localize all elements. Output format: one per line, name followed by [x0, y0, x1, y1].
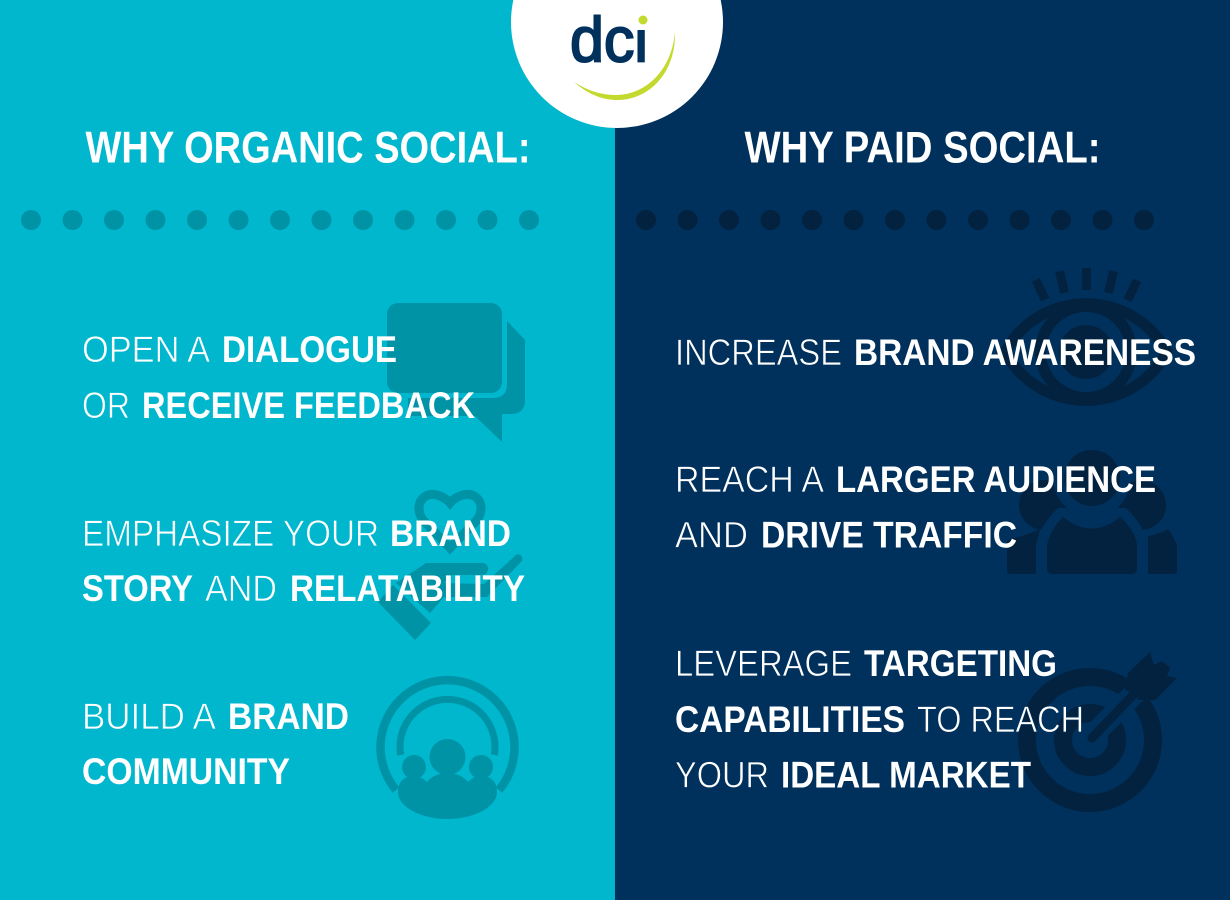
text: open a dialogue: OR — [82, 385, 130, 426]
dotted row: paid — [636, 210, 1154, 230]
text: targeting capabilities: YOUR — [675, 754, 769, 796]
panel: paid social background — [615, 0, 1230, 900]
text: targeting capabilities: TO REACH — [917, 699, 1084, 740]
text: brand community: BUILD A — [82, 696, 216, 737]
text: open a dialogue — [82, 329, 475, 426]
text: larger audience: AND — [675, 514, 748, 556]
text: brand story: AND — [205, 568, 277, 609]
logo badge — [511, 0, 723, 128]
text: brand community — [82, 696, 349, 792]
text: brand story: STORY — [82, 568, 193, 609]
text: open a dialogue: DIALOGUE — [222, 329, 397, 370]
text: open a dialogue: OPEN A — [82, 329, 210, 370]
text: larger audience: REACH A — [675, 459, 824, 500]
text: brand story: RELATABILITY — [290, 568, 525, 609]
dotted row: organic — [21, 210, 539, 230]
text: larger audience — [675, 459, 1156, 556]
heading: why paid social: WHY PAID SOCIAL: — [744, 124, 1100, 172]
text: larger audience: LARGER AUDIENCE — [836, 459, 1156, 500]
text: brand community: BRAND — [228, 696, 349, 737]
icon: audience group — [1007, 439, 1177, 580]
text: brand story — [82, 513, 525, 609]
text: brand community: COMMUNITY — [82, 751, 290, 792]
text: open a dialogue: RECEIVE FEEDBACK — [142, 385, 475, 426]
text: targeting capabilities — [675, 643, 1084, 796]
icon: chat bubbles — [387, 303, 525, 442]
text: brand story: BRAND — [390, 513, 511, 554]
logo wordmark: dci — [570, 6, 648, 76]
text: targeting capabilities: IDEAL MARKET — [781, 754, 1031, 796]
icon: community circle — [380, 680, 514, 819]
text: targeting capabilities: TARGETING — [864, 643, 1057, 684]
heading: why organic social: WHY ORGANIC SOCIAL: — [86, 124, 530, 172]
text: brand story: EMPHASIZE YOUR — [82, 513, 379, 554]
text: targeting capabilities: LEVERAGE — [675, 643, 852, 684]
icon: eye — [1005, 268, 1167, 400]
icon: hand holding heart — [378, 494, 522, 640]
text: targeting capabilities: CAPABILITIES — [675, 699, 905, 740]
text: larger audience: DRIVE TRAFFIC — [761, 514, 1017, 556]
text: brand awareness: BRAND AWARENESS — [854, 332, 1196, 373]
panel: organic social background — [0, 0, 615, 900]
icon: target with arrow — [1027, 652, 1177, 803]
text: brand awareness: INCREASE — [675, 332, 842, 373]
text: brand awareness — [675, 332, 1196, 373]
